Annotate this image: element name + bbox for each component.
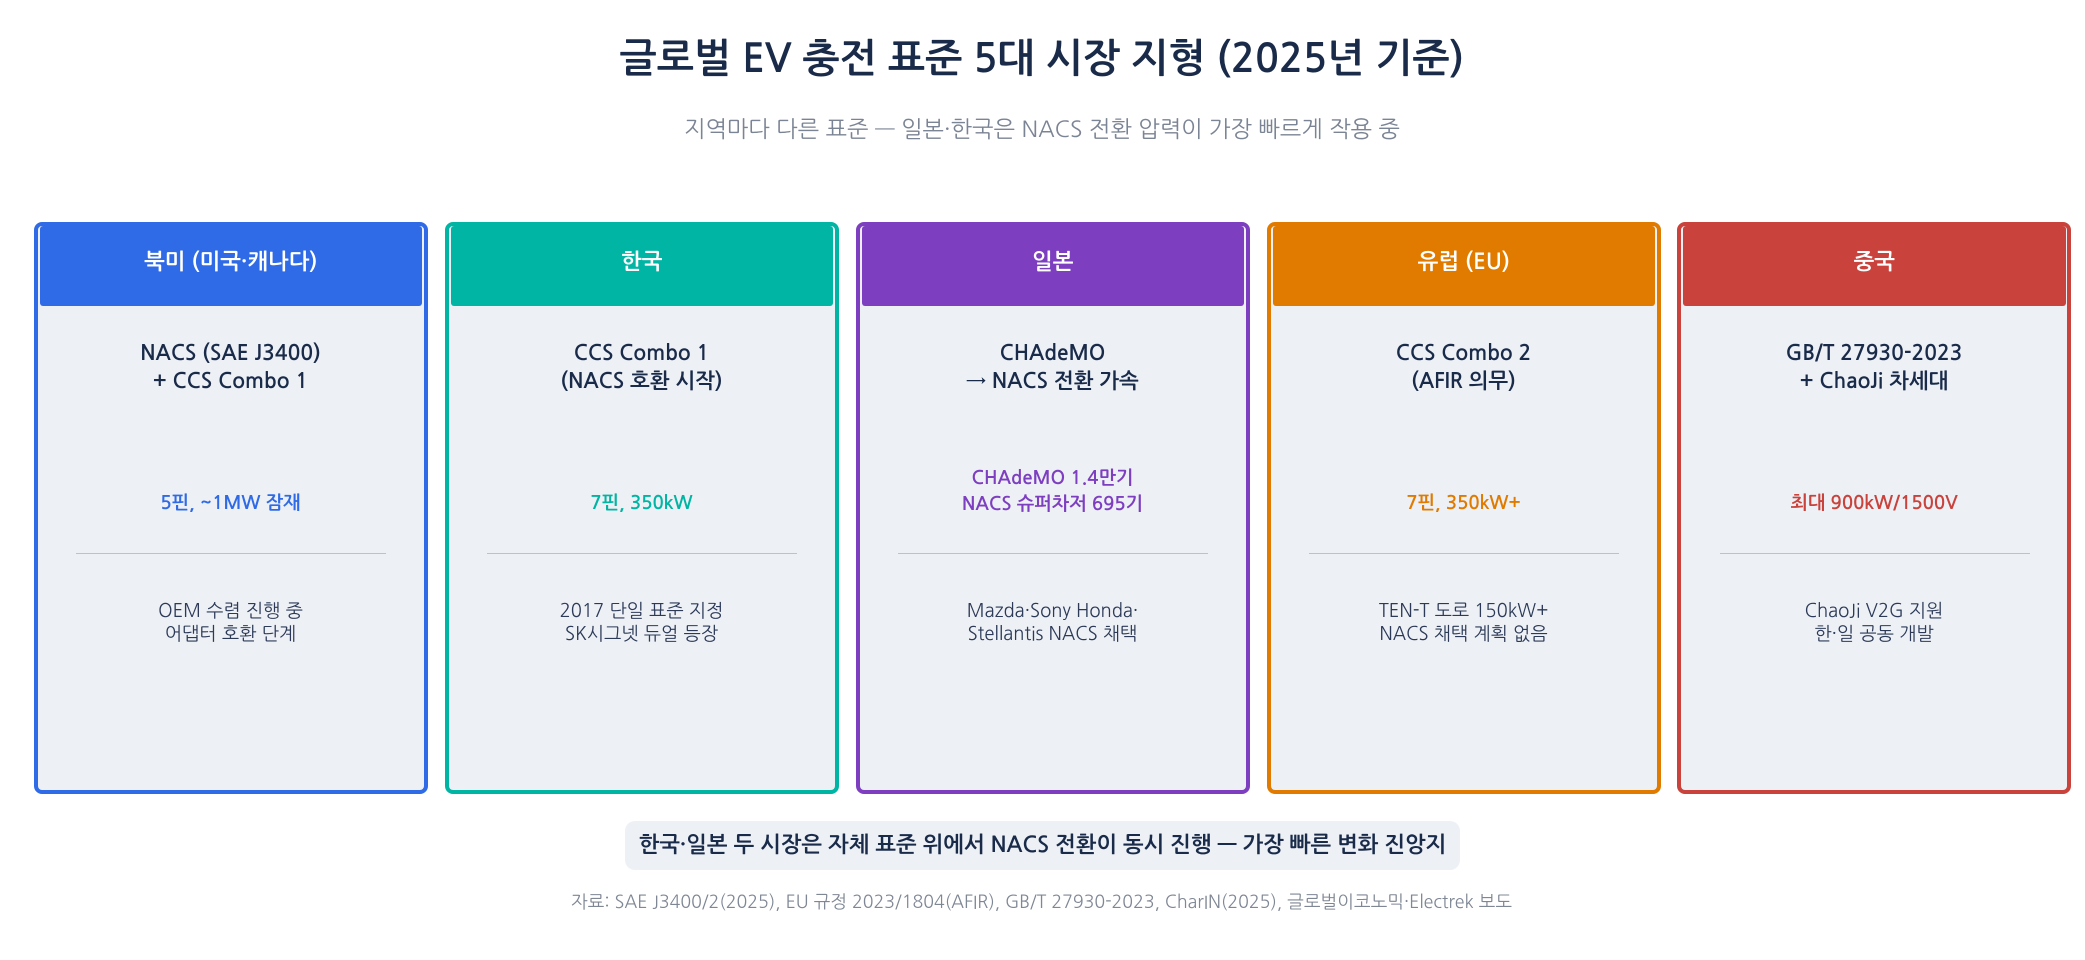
note: China: ChaoJi V2G 지원 — [1805, 601, 1943, 620]
standard: EU: (AFIR 의무) — [1411, 371, 1516, 392]
spec: Japan: NACS 슈퍼차저 695기 — [962, 494, 1143, 513]
callout: 한국·일본 두 시장은 자체 표준 위에서 NACS 전환이 동시 진행 — 가장 빠른 변화 진앙지 — [639, 835, 1446, 856]
standard: North America — [140, 342, 321, 392]
standard: Korea: CCS Combo 1 — [574, 343, 709, 364]
header: EU — [1272, 226, 1655, 306]
header: China — [1683, 226, 2066, 306]
header: North America — [40, 226, 422, 306]
standard: Korea: (NACS 호환 시작) — [560, 371, 723, 392]
panel: China — [1677, 222, 2071, 794]
header: Korea — [450, 226, 833, 306]
spec: EU: 7핀, 350kW+ — [1406, 493, 1521, 512]
note: EU: TEN-T 도로 150kW+ — [1379, 601, 1548, 620]
standard: China: + ChaoJi 차세대 — [1800, 371, 1948, 392]
note: EU — [1379, 601, 1548, 643]
standard: Korea — [560, 343, 723, 392]
subtitle: 지역마다 다른 표준 — 일본·한국은 NACS 전환 압력이 가장 빠르게 작용 중 — [684, 118, 1400, 141]
note: North America — [158, 601, 303, 643]
standard: Japan: → NACS 전환 가속 — [966, 371, 1139, 392]
note: China — [1805, 601, 1943, 643]
spec: North America: 5핀, ~1MW 잠재 — [160, 493, 301, 512]
note: North America: 어댑터 호환 단계 — [165, 624, 296, 643]
spec: Japan: CHAdeMO 1.4만기 — [972, 468, 1133, 487]
standard: China: GB/T 27930-2023 — [1786, 343, 1962, 364]
standard: Japan: CHAdeMO — [1000, 343, 1105, 364]
header: China: 중국 — [1854, 251, 1895, 273]
spec: Japan — [962, 468, 1143, 513]
note: Japan — [967, 601, 1138, 643]
standard: North America: + CCS Combo 1 — [153, 371, 308, 392]
note: China: 한·일 공동 개발 — [1814, 624, 1934, 643]
source note: 자료: SAE J3400/2(2025), EU 규정 2023/1804(AFIR), GB/T 27930-2023, CharIN(2025), 글로벌이코노믹·Electrek 보도 — [571, 893, 1512, 911]
panel: North America — [34, 222, 428, 794]
header: Japan: 일본 — [1032, 251, 1073, 273]
note: Japan: Mazda·Sony Honda· — [967, 601, 1138, 620]
note: North America: OEM 수렴 진행 중 — [158, 601, 303, 620]
panel: Korea — [444, 222, 838, 794]
callout — [625, 821, 1460, 870]
header: Korea: 한국 — [621, 251, 662, 273]
note: Korea: SK시그넷 듀얼 등장 — [565, 624, 718, 643]
note: Korea — [560, 601, 723, 643]
note: Japan: Stellantis NACS 채택 — [968, 624, 1137, 643]
standard: EU — [1396, 343, 1531, 392]
header: EU: 유럽 (EU) — [1418, 251, 1510, 273]
title: 글로벌 EV 충전 표준 5대 시장 지형 (2025년 기준) — [619, 39, 1464, 78]
standard: EU: CCS Combo 2 — [1396, 343, 1531, 364]
panel: Japan — [856, 222, 1250, 794]
standard: Japan — [966, 343, 1139, 392]
note: EU: NACS 채택 계획 없음 — [1379, 624, 1548, 643]
standard: North America: NACS (SAE J3400) — [140, 343, 321, 364]
standard: China — [1786, 343, 1962, 392]
note: Korea: 2017 단일 표준 지정 — [560, 601, 723, 620]
panel: EU — [1266, 222, 1660, 794]
header: Japan — [862, 226, 1244, 306]
spec: China: 최대 900kW/1500V — [1790, 493, 1958, 512]
spec: Korea: 7핀, 350kW — [590, 493, 693, 512]
header: North America: 북미 (미국·캐나다) — [144, 251, 317, 273]
